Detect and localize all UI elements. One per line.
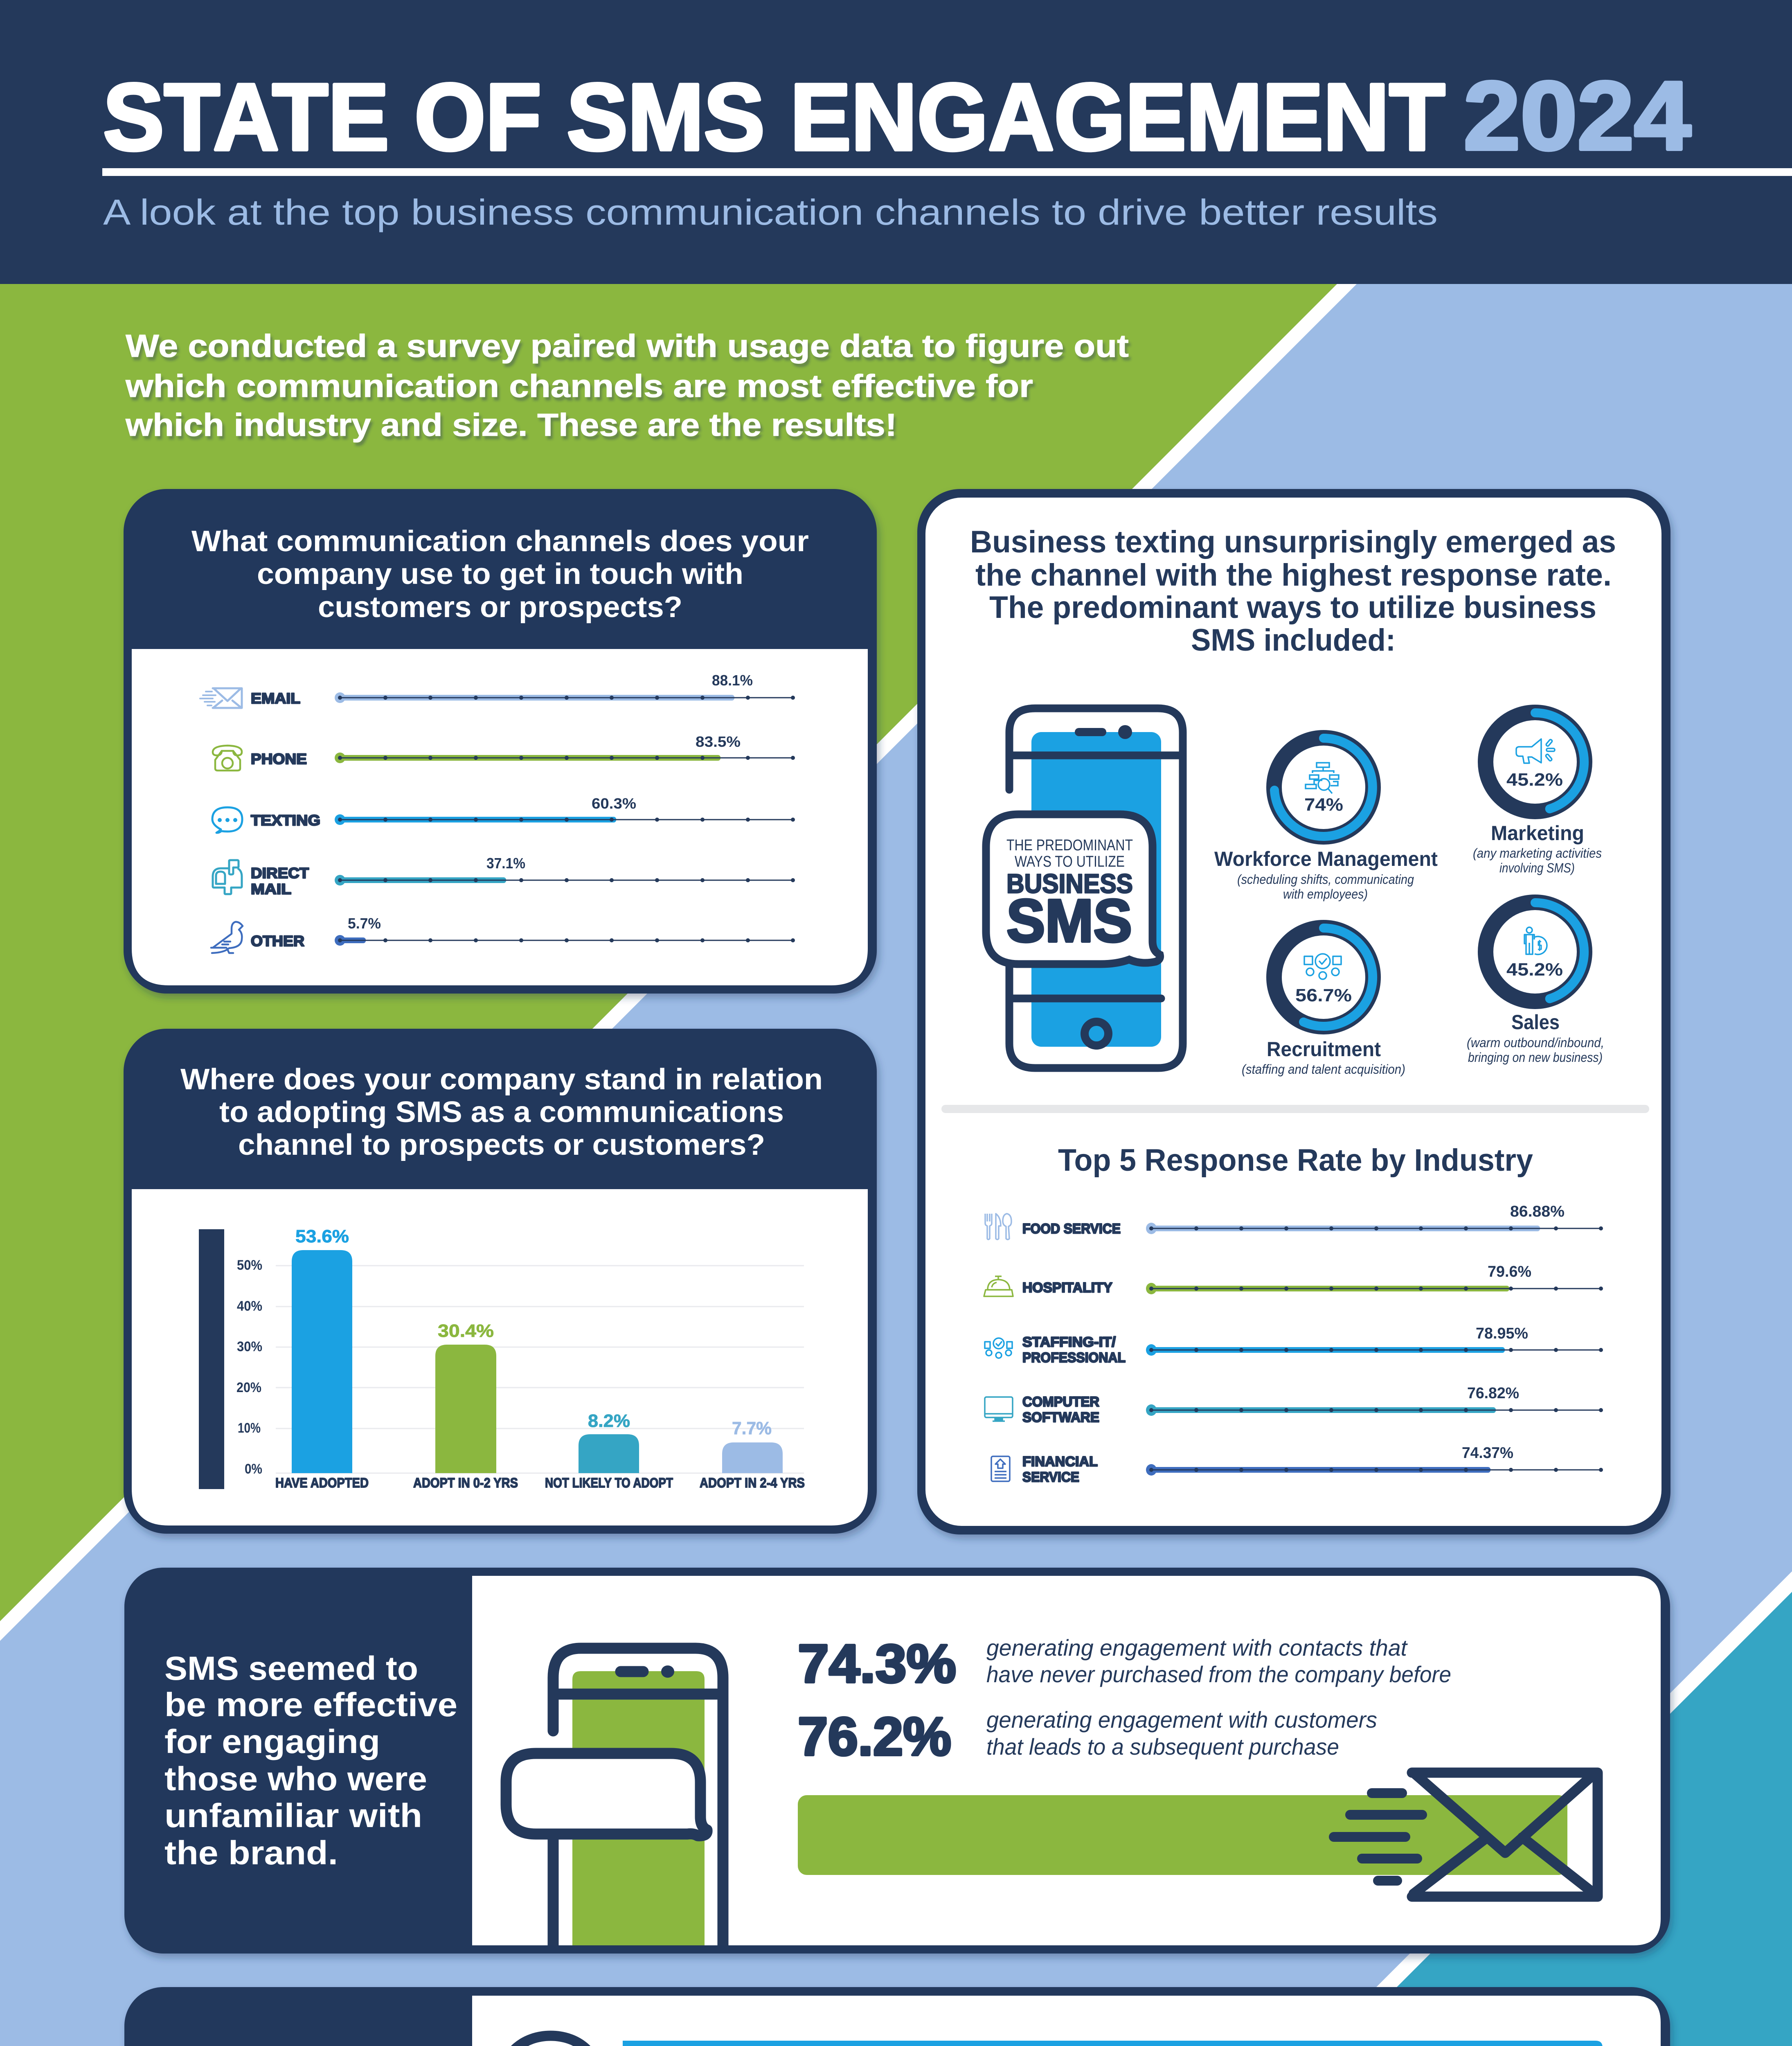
icon: SMS chat bubble (503, 2036, 598, 2046)
side text: unfamiliar with (164, 1797, 422, 1834)
intro text: We conducted a survey paired with usage data to figure out (126, 328, 1129, 364)
panel heading: SMS included: (1191, 623, 1396, 658)
row: hospitality (1022, 1263, 1603, 1296)
side text: SMS seemed to (164, 1650, 418, 1687)
donut: workforce management: with employees) (1283, 887, 1368, 901)
row: email: EMAIL (251, 690, 300, 707)
row: hospitality: HOSPITALITY (1022, 1280, 1112, 1296)
panel heading: company use to get in touch with (257, 558, 743, 590)
bar chart: 0% (245, 1461, 262, 1477)
row: financial service: SERVICE (1022, 1469, 1079, 1485)
icon: chat bubble (212, 807, 242, 833)
stat: 76.2%: generating engagement with customers (986, 1707, 1377, 1733)
row: direct mail: MAIL (251, 881, 291, 897)
icon: cutlery (985, 1214, 1011, 1239)
donut: workforce management: Workforce Management (1214, 847, 1438, 870)
stat: 76.2%: that leads to a subsequent purchase (986, 1734, 1339, 1760)
panel: SMS engagement (124, 1568, 1670, 1964)
bar chart: ADOPT IN 2-4 YRS (700, 1475, 805, 1490)
phone illustration with speech bubble: WAYS TO UTILIZE (1015, 853, 1125, 870)
panel heading: Where does your company stand in relation (180, 1063, 823, 1096)
icon: email (200, 688, 242, 708)
panel heading (191, 525, 809, 624)
panel heading: The predominant ways to utilize business (989, 590, 1596, 625)
icon: megaphone (1516, 739, 1555, 763)
donut: workforce management: 74% (1304, 795, 1343, 815)
bar chart: 30.4% (438, 1321, 494, 1341)
row: phone: 83.5% (696, 733, 741, 750)
row: computer software (1022, 1385, 1603, 1425)
icon: salesperson (1524, 927, 1547, 954)
row: food service: FOOD SERVICE (1022, 1221, 1121, 1237)
icon: financial document (991, 1456, 1010, 1481)
bar chart: ADOPT IN 0-2 YRS (413, 1475, 518, 1490)
row: financial service: FINANCIAL (1022, 1454, 1098, 1469)
row: other (251, 915, 795, 949)
heading: top 5 response rate: Top 5 Response Rate by Industry (1058, 1143, 1533, 1178)
side text: be more effective (164, 1686, 457, 1724)
row: computer software: 76.82% (1467, 1385, 1519, 1402)
panel heading: to adopting SMS as a communications (219, 1096, 784, 1129)
panel heading: the channel with the highest response rate. (975, 558, 1612, 593)
donut: recruitment: Recruitment (1267, 1038, 1381, 1061)
donut: workforce management (1214, 738, 1438, 901)
stat: 76.2%: 76.2% (798, 1706, 951, 1767)
phone illustration with speech bubble: BUSINESS (1006, 868, 1133, 899)
row: other: 5.7% (348, 915, 381, 932)
donut: marketing: involving SMS) (1499, 861, 1575, 875)
row: financial service: 74.37% (1462, 1444, 1513, 1462)
phone illustration with speech bubble: THE PREDOMINANT (1006, 837, 1133, 854)
icon: org chart (1306, 763, 1339, 793)
row: phone: PHONE (251, 750, 307, 767)
bar chart: 8.2% (588, 1411, 630, 1431)
icon: telephone (213, 746, 242, 771)
row: staffing-IT / professional (1022, 1325, 1603, 1366)
stat: 74.3%: generating engagement with contacts that (986, 1635, 1408, 1661)
bar chart: 53.6% (295, 1226, 349, 1246)
bar: SMS (623, 2041, 1603, 2046)
panel: SMS adoption (124, 1029, 877, 1534)
title: STATE OF SMS ENGAGEMENT (103, 64, 1445, 170)
panel heading: channel to prospects or customers? (238, 1129, 765, 1161)
donut: marketing: Marketing (1491, 822, 1584, 845)
donut: sales (1467, 902, 1604, 1065)
icon: monitor (985, 1397, 1013, 1421)
row: texting: 60.3% (592, 795, 636, 812)
panel: business texting uses and industries (917, 489, 1670, 1534)
row: staffing-IT / professional: STAFFING-IT/ (1022, 1334, 1116, 1350)
donut: sales: 45.2% (1506, 960, 1563, 980)
header band (0, 0, 1792, 284)
row: email (251, 672, 795, 707)
panel heading: Business texting unsurprisingly emerged as (970, 525, 1616, 559)
stat: 76.2% (798, 1706, 1377, 1767)
row: other: OTHER (251, 933, 304, 949)
row: email: 88.1% (712, 672, 753, 689)
side text: the brand. (164, 1834, 338, 1872)
bar chart: HAVE ADOPTED (275, 1475, 369, 1490)
donut: marketing: 45.2% (1506, 770, 1563, 790)
row: hospitality: 79.6% (1488, 1263, 1531, 1280)
bar chart (199, 1226, 805, 1490)
icon: mailbox (213, 860, 242, 894)
donut: marketing: (any marketing activities (1473, 846, 1602, 861)
stat: 74.3% (798, 1634, 1451, 1694)
row: direct mail: 37.1% (486, 855, 525, 872)
panel heading (970, 525, 1616, 658)
donut: sales: (warm outbound/inbound, (1467, 1035, 1604, 1050)
row: food service: 86.88% (1510, 1203, 1565, 1220)
icon: pigeon (211, 922, 243, 953)
panel: SMS vs MMS response rate (124, 1987, 1670, 2046)
bar chart: 50% (237, 1257, 262, 1273)
panel: communication channels (124, 489, 877, 994)
side text: those who were (164, 1760, 427, 1798)
panel heading: customers or prospects? (318, 591, 682, 624)
bar chart: 40% (237, 1298, 262, 1314)
donut: recruitment: 56.7% (1295, 985, 1352, 1005)
row: phone (251, 733, 795, 767)
title year: 2024 (1463, 62, 1691, 170)
donut: recruitment (1242, 928, 1405, 1077)
intro text: which communication channels are most effective for (125, 368, 1033, 404)
panel heading: What communication channels does your (191, 525, 809, 558)
bar chart: 7.7% (732, 1418, 772, 1438)
stat: 74.3%: have never purchased from the company before (986, 1661, 1451, 1687)
row: texting (251, 795, 795, 829)
phone illustration with speech bubble: SMS (1006, 887, 1132, 955)
bar chart: 30% (237, 1339, 262, 1354)
bar chart: 20% (236, 1380, 261, 1395)
donut: sales: Sales (1511, 1011, 1560, 1034)
title underline (102, 168, 1792, 176)
row: direct mail: DIRECT (251, 865, 309, 881)
row: texting: TEXTING (251, 812, 320, 829)
row: staffing-IT / professional: 78.95% (1476, 1325, 1528, 1342)
phone illustration with speech bubble (986, 708, 1183, 1068)
donut: recruitment: (staffing and talent acquisition) (1242, 1062, 1405, 1077)
intro text (125, 328, 1129, 443)
bar chart: 10% (238, 1420, 261, 1436)
row: staffing-IT / professional: PROFESSIONAL (1022, 1350, 1126, 1366)
green bar with envelope (798, 1773, 1598, 1897)
panel heading (180, 1063, 823, 1161)
donut: sales: bringing on new business) (1468, 1050, 1603, 1065)
row: financial service (1022, 1444, 1603, 1485)
donut: marketing (1473, 712, 1602, 875)
row: computer software: COMPUTER (1022, 1394, 1099, 1410)
bar chart: NOT LIKELY TO ADOPT (545, 1475, 673, 1490)
row: food service (1022, 1203, 1603, 1237)
subtitle: A look at the top business communication channels to drive better results (103, 192, 1438, 232)
icon: service bell (984, 1276, 1013, 1296)
side text (164, 1650, 457, 1872)
icon: staffing (1304, 954, 1341, 979)
intro text: which industry and size. These are the results! (125, 407, 897, 443)
side text: for engaging (164, 1723, 380, 1760)
row: computer software: SOFTWARE (1022, 1410, 1099, 1425)
phone illustration (506, 1648, 723, 1964)
icon: staffing (985, 1338, 1012, 1358)
donut: workforce management: (scheduling shifts, communicating (1237, 872, 1414, 887)
stat: 74.3%: 74.3% (798, 1634, 956, 1694)
row: direct mail (251, 855, 795, 897)
